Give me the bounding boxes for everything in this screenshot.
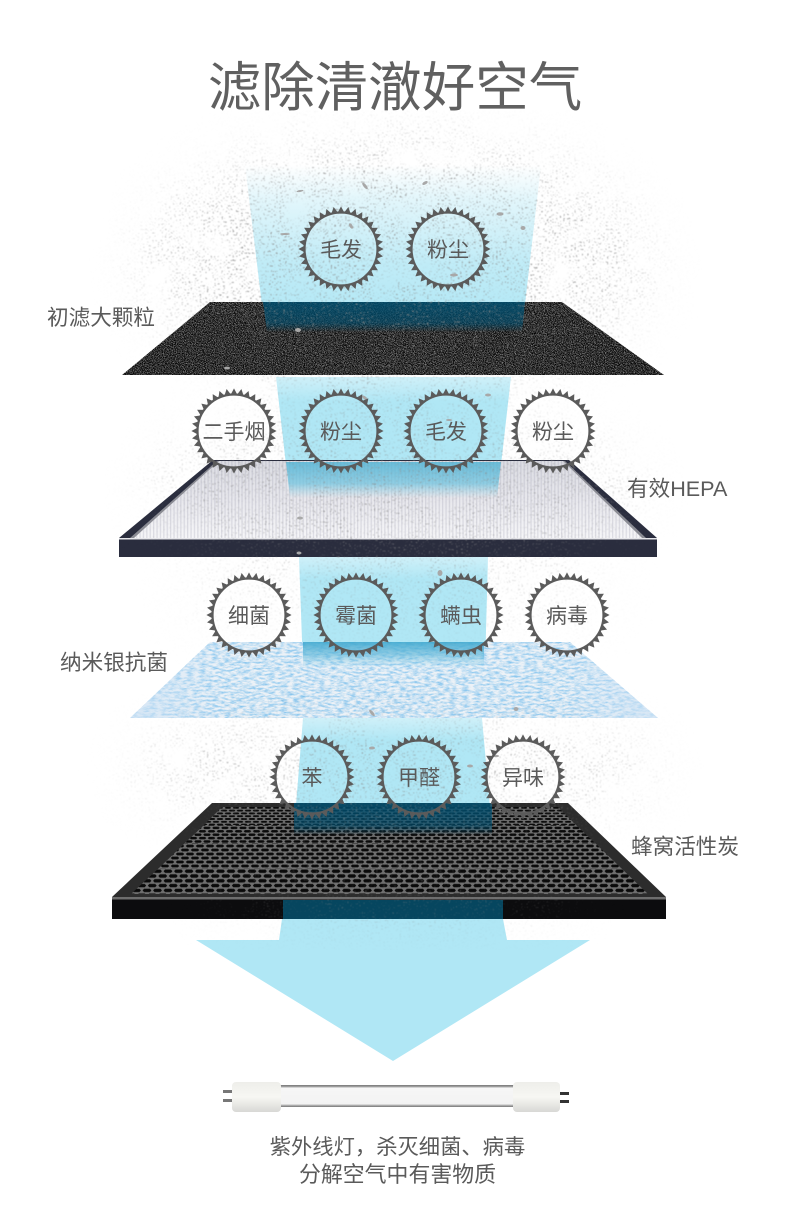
badge: 毛发 xyxy=(295,203,387,295)
filter badges: row 4 xyxy=(266,731,569,823)
badge: 粉尘 third xyxy=(507,385,599,477)
dust particles cloud xyxy=(127,115,664,939)
badge: 甲醛 xyxy=(373,731,465,823)
badge: 粉尘 third: 粉尘 xyxy=(532,421,574,444)
label: carbon: 蜂窝活性炭 xyxy=(631,834,739,859)
badge: 异味: 异味 xyxy=(502,767,544,790)
badge: 粉尘 second: 粉尘 xyxy=(320,421,362,444)
badge: 甲醛: 甲醛 xyxy=(398,767,440,790)
caption: 紫外线灯，杀灭细菌、病毒 xyxy=(270,1135,525,1159)
title: 滤除清澈好空气 xyxy=(208,59,582,118)
badge: 二手烟 xyxy=(188,385,280,477)
badge: 细菌 xyxy=(203,569,295,661)
badge: 苯 xyxy=(266,731,358,823)
panel: HEPA filter xyxy=(119,460,657,557)
label: pre-filter: 初滤大颗粒 xyxy=(47,305,155,330)
caption xyxy=(270,1135,525,1187)
badge: 二手烟: 二手烟 xyxy=(202,421,266,444)
label: HEPA: 有效HEPA xyxy=(627,476,728,501)
badge: 病毒: 病毒 xyxy=(546,605,588,628)
badge: 毛发: 毛发 xyxy=(320,239,362,262)
airflow tint on silver layer xyxy=(303,642,484,668)
badge: 螨虫: 螨虫 xyxy=(440,605,482,628)
filter badges: row 2 xyxy=(188,385,599,477)
badge: 毛发 second xyxy=(400,385,492,477)
badge: 异味 xyxy=(477,731,569,823)
airflow tint on carbon top xyxy=(294,803,492,835)
filter badges: row 1 xyxy=(295,203,494,295)
filter badges: row 3 xyxy=(203,569,613,661)
airflow band: above silver filter xyxy=(299,557,488,668)
panel: pre-filter foam layer xyxy=(122,302,664,375)
airflow band: above carbon filter xyxy=(294,718,492,830)
badge: 毛发 second: 毛发 xyxy=(425,421,467,444)
badge: 粉尘: 粉尘 xyxy=(427,239,469,262)
icon: UV lamp xyxy=(223,1082,569,1112)
airflow band: above pre-filter xyxy=(245,165,541,330)
badge: 病毒 xyxy=(521,569,613,661)
airflow bands xyxy=(245,165,541,830)
panel: honeycomb carbon filter xyxy=(112,803,666,919)
label: nano silver: 纳米银抗菌 xyxy=(60,650,168,675)
silver layer blue edges xyxy=(130,642,658,718)
panel: nano silver antibacterial layer xyxy=(130,642,658,718)
airflow band: above HEPA xyxy=(276,377,511,500)
outflow arrow xyxy=(196,919,590,1061)
badge: 螨虫 xyxy=(415,569,507,661)
airflow tint on HEPA xyxy=(286,462,501,498)
caption: 分解空气中有害物质 xyxy=(299,1162,496,1187)
airflow tint on carbon base xyxy=(283,900,503,919)
badge: 霉菌 xyxy=(310,569,402,661)
badge: 细菌: 细菌 xyxy=(228,605,270,628)
airflow tint on foam xyxy=(263,302,525,332)
dust flakes xyxy=(224,180,526,768)
badge: 苯: 苯 xyxy=(302,767,322,790)
badge: 霉菌: 霉菌 xyxy=(335,605,377,628)
badge: 粉尘 second xyxy=(295,385,387,477)
badge: 粉尘 xyxy=(402,203,494,295)
